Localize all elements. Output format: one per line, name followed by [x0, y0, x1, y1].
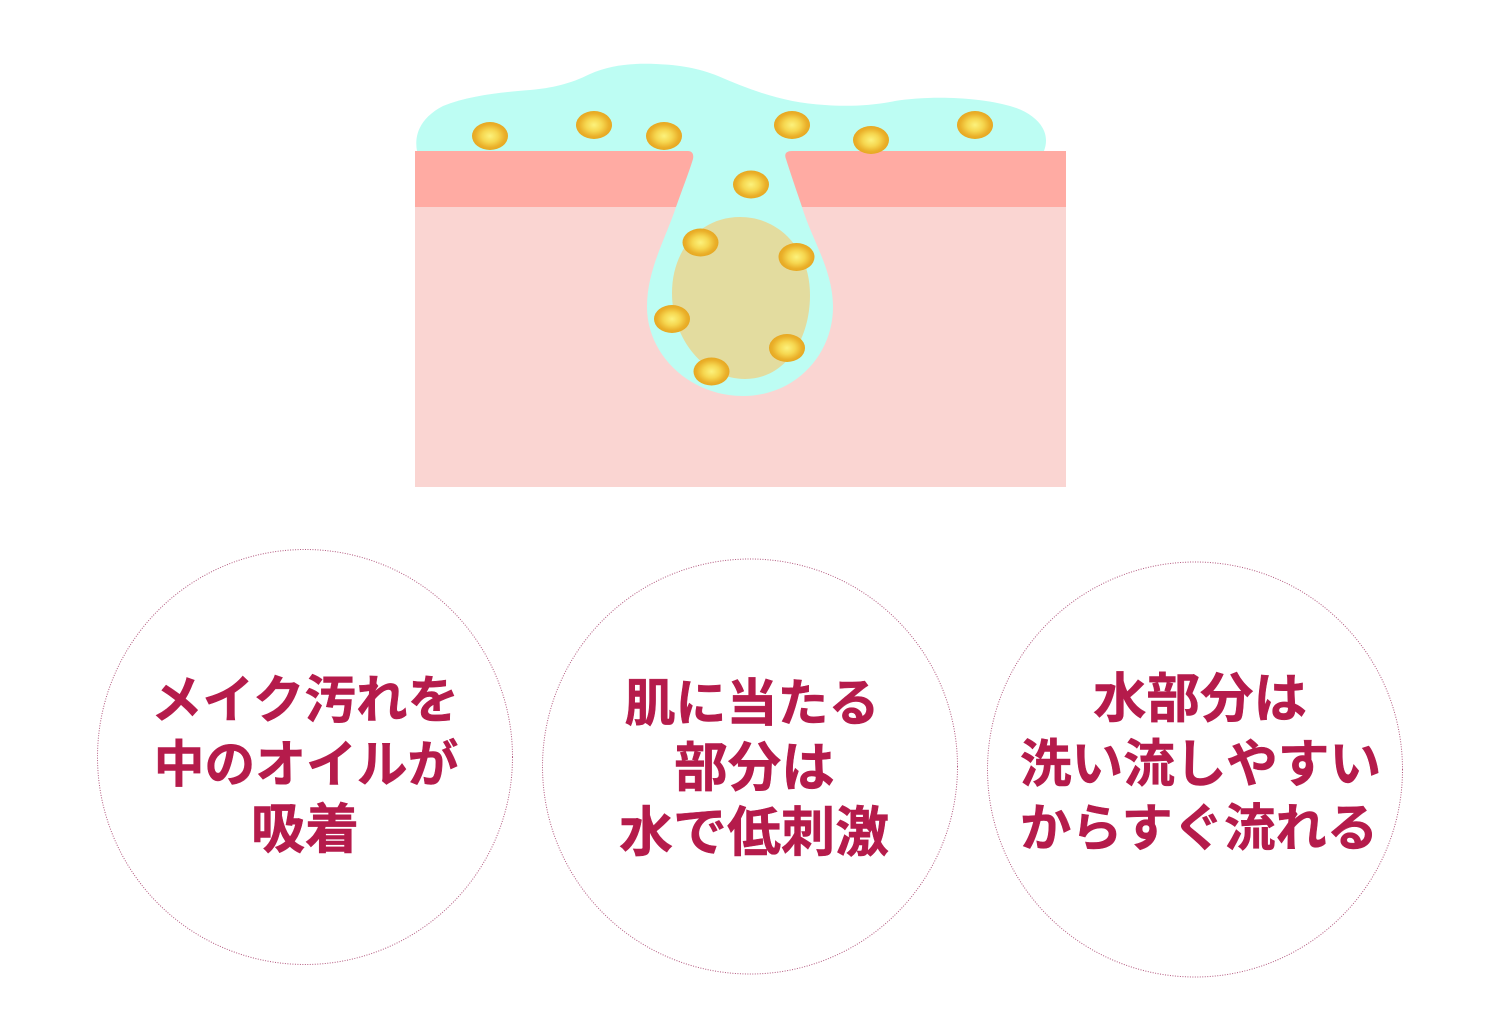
circle callout: makeup absorption — [98, 550, 512, 964]
circle callout: low irritation: 水で低刺激 — [619, 803, 889, 863]
circle callout: easy rinse — [988, 562, 1402, 977]
circle callout: easy rinse: からすぐ流れる — [1020, 800, 1378, 857]
upper skin layer — [415, 151, 1066, 207]
sebum plug in pore — [672, 217, 810, 379]
oil droplets — [472, 111, 993, 386]
circle callout: makeup absorption: 吸着 — [251, 800, 359, 860]
lower skin layer — [415, 207, 1066, 487]
circle callout: easy rinse: 洗い流しやすい — [1020, 735, 1381, 793]
circle callout: easy rinse: 水部分は — [1093, 670, 1307, 729]
cleansing liquid on skin and in pore — [416, 64, 1046, 396]
skin cross-section diagram — [415, 64, 1066, 487]
circle callout: low irritation: 肌に当たる — [624, 675, 880, 732]
circle callout: makeup absorption: 中のオイルが — [154, 736, 458, 793]
circle callout: low irritation: 部分は — [674, 739, 835, 798]
circle callout: makeup absorption: メイク汚れを — [151, 671, 459, 729]
circle callout: low irritation — [542, 559, 958, 974]
